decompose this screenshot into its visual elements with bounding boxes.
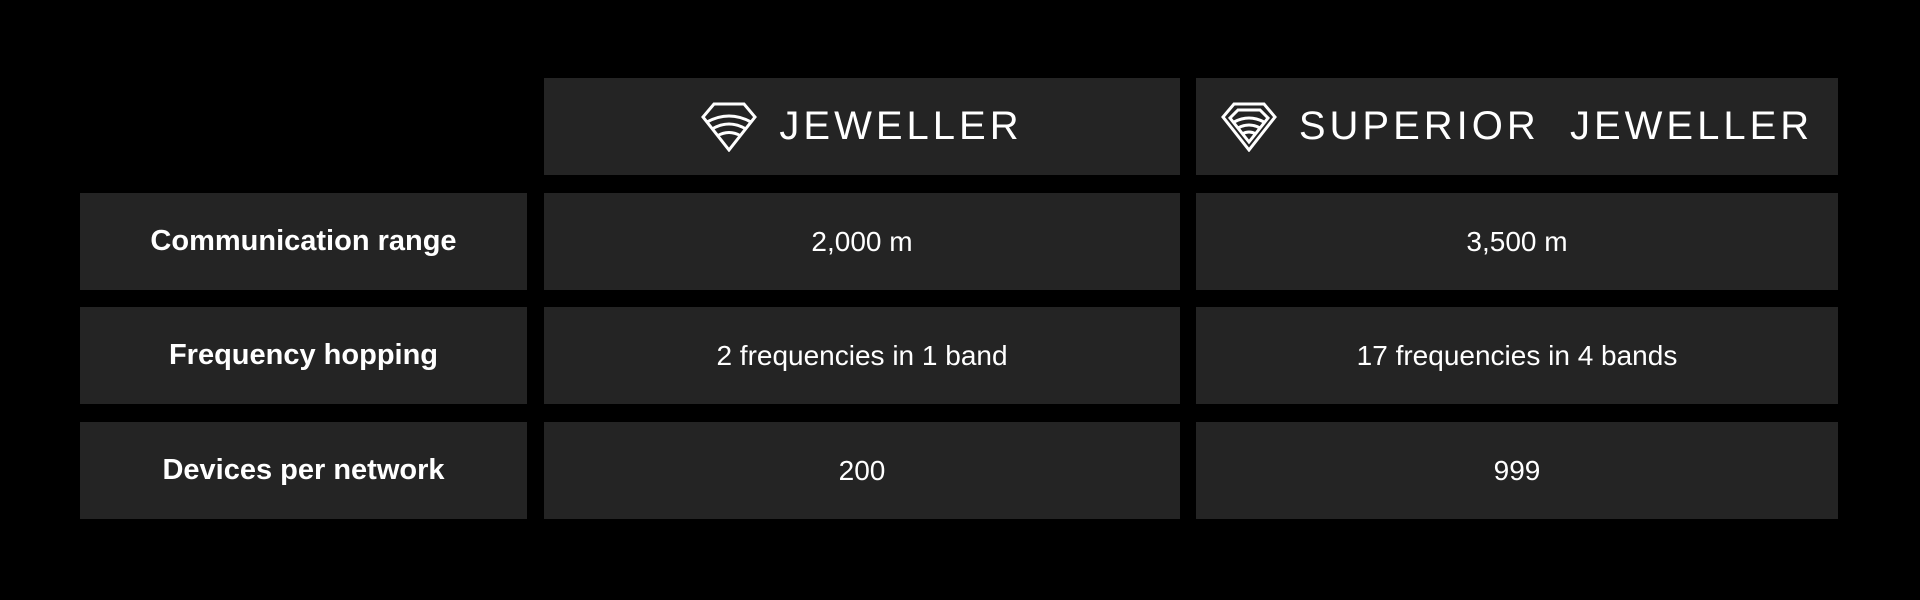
value: superior range — [1196, 193, 1838, 290]
value: jeweller range: 2,000 m — [811, 226, 913, 256]
row label: devices per network — [80, 422, 527, 519]
header: jeweller — [544, 78, 1180, 175]
value: jeweller hopping — [544, 307, 1180, 404]
value: jeweller range — [544, 193, 1180, 290]
icon: superior diamond — [1221, 102, 1277, 152]
icon: jeweller diamond — [701, 102, 757, 152]
row label: communication range — [80, 193, 527, 290]
row label: devices per network: Devices per network — [162, 454, 445, 486]
value: jeweller devices: 200 — [839, 454, 885, 486]
header: superior jeweller: SUPERIOR JEWELLER — [1299, 104, 1813, 148]
value: superior devices — [1196, 422, 1838, 519]
header: jeweller: JEWELLER — [779, 104, 1023, 148]
value: jeweller hopping: 2 frequencies in 1 band — [716, 340, 1008, 370]
row label: frequency hopping: Frequency hopping — [169, 339, 438, 371]
value: superior hopping — [1196, 307, 1838, 404]
value: superior devices: 999 — [1494, 454, 1540, 486]
header: superior jeweller — [1196, 78, 1838, 175]
row label: communication range: Communication range — [150, 225, 457, 257]
value: superior range: 3,500 m — [1466, 226, 1568, 256]
value: superior hopping: 17 frequencies in 4 bands — [1357, 340, 1677, 370]
value: jeweller devices — [544, 422, 1180, 519]
row label: frequency hopping — [80, 307, 527, 404]
